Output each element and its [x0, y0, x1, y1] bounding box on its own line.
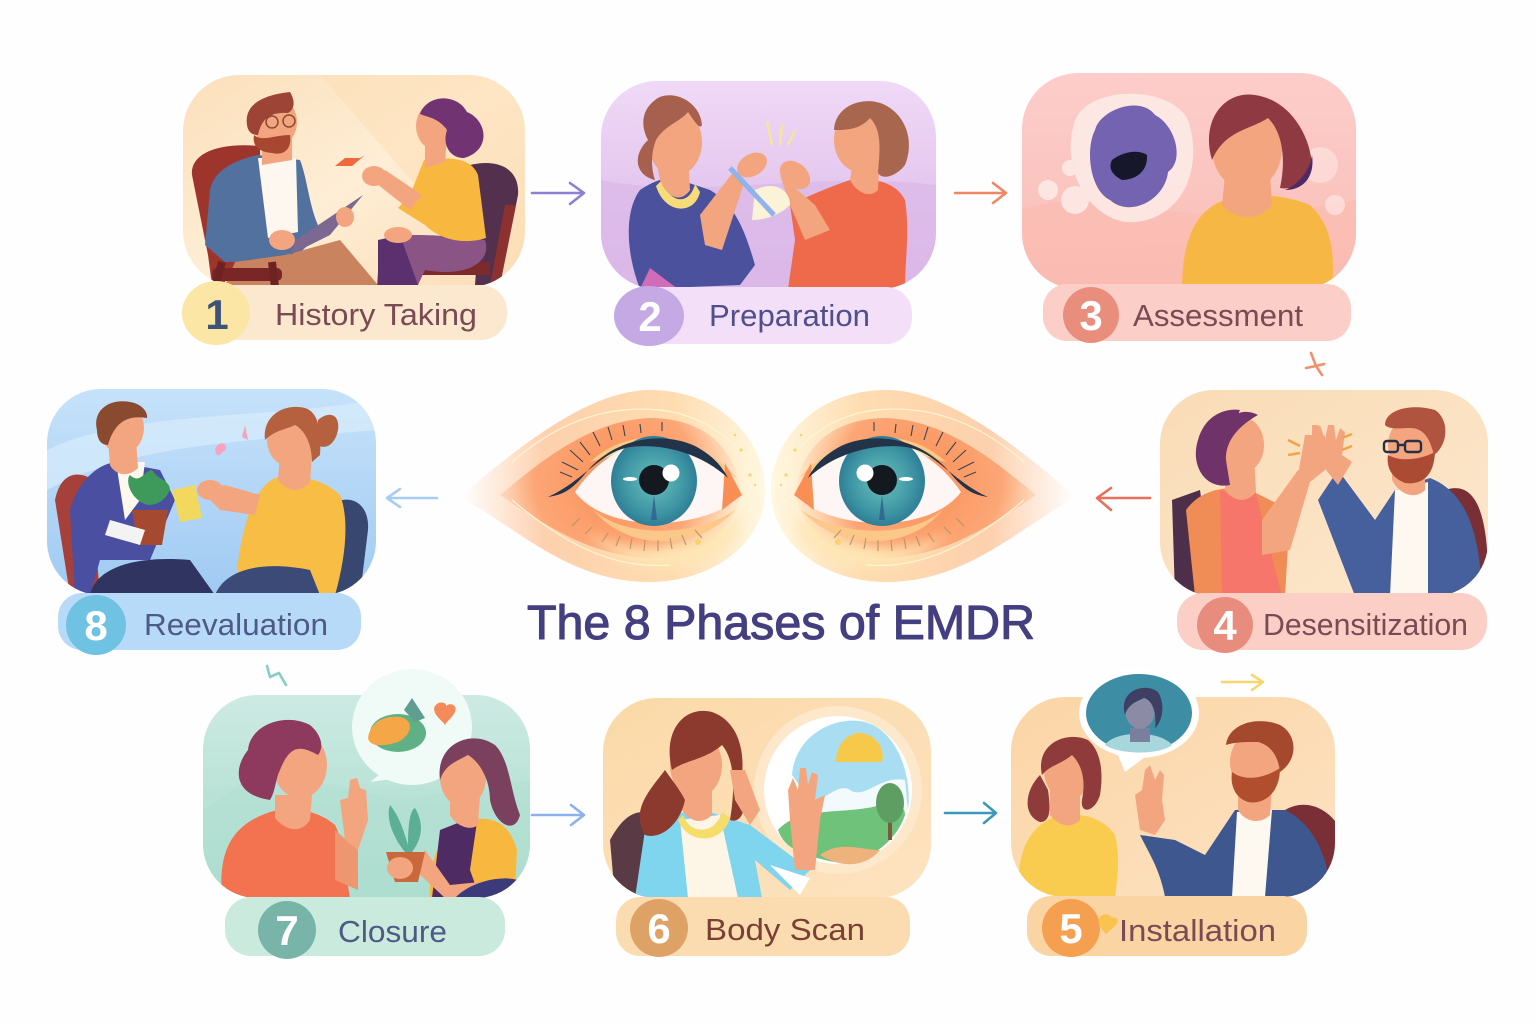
label pill [1177, 593, 1487, 650]
label pill [616, 897, 910, 956]
arrow: 2 to 3 [955, 183, 1006, 203]
number badge [630, 899, 688, 957]
label text: Reevaluation [144, 607, 328, 642]
illustration: man with plant and woman talking [47, 389, 376, 595]
arrow: 1 to 2 [532, 183, 584, 204]
panel: phase 3 assessment [1022, 73, 1356, 343]
illustration: woman with dark thought cloud [1022, 73, 1356, 289]
label pill [625, 287, 912, 344]
illustration: left woman and background [203, 695, 530, 898]
thought bubble [352, 669, 472, 785]
label pill [200, 285, 507, 340]
label pill [1043, 284, 1351, 341]
number: 5 [1059, 905, 1083, 952]
panel: phase 1 history taking [182, 75, 525, 345]
panel: phase 2 preparation [601, 81, 936, 346]
number: 3 [1079, 292, 1103, 339]
panel: phase 8 reevaluation [47, 389, 376, 655]
illustration: right woman with plant [386, 738, 520, 898]
arrow: 6 to 5 [945, 803, 996, 823]
label pill [58, 593, 361, 650]
label text: Installation [1119, 913, 1276, 948]
number badge [258, 901, 316, 959]
label pill [1027, 896, 1307, 956]
icon: small heart [1099, 914, 1118, 934]
label text: Closure [338, 914, 447, 949]
number badge [182, 281, 250, 345]
arrow: 4 to eyes [1097, 488, 1150, 510]
panel: phase 4 desensitization [1160, 390, 1488, 653]
icon: left eye [460, 390, 765, 582]
number: 7 [275, 907, 299, 954]
illustration: woman and man raised hands [1160, 390, 1488, 596]
number: 8 [84, 602, 108, 649]
arrow: 8 to 7 [267, 666, 286, 685]
number badge [1063, 287, 1119, 343]
illustration: therapist and client seated [183, 75, 525, 287]
label text: History Taking [275, 297, 477, 332]
central eyes [460, 390, 1076, 582]
panel: phase 6 body scan [603, 698, 931, 957]
number badge [66, 595, 126, 655]
arrow: 3 to 4 [1306, 353, 1324, 375]
arrow: 5 to next [1222, 675, 1263, 690]
arrow: eyes to 8 [387, 489, 437, 507]
panel: phase 5 installation [1011, 668, 1340, 957]
number: 6 [647, 905, 671, 952]
number badge [1042, 899, 1100, 957]
panel: phase 7 closure [203, 669, 530, 959]
illustration: woman touching head with landscape window [603, 698, 931, 898]
label pill [225, 897, 505, 956]
number: 4 [1213, 602, 1237, 649]
label text: Desensitization [1263, 607, 1468, 642]
number badge [614, 286, 684, 346]
label text: Preparation [709, 298, 870, 333]
arrow: 7 to 6 [532, 805, 584, 825]
illustration: woman and man with positive thought [1011, 697, 1340, 897]
label text: Body Scan [705, 912, 865, 947]
thought bubble portrait [1079, 668, 1199, 772]
illustration: two women tapping hands [601, 81, 936, 289]
label text: Assessment [1133, 298, 1303, 333]
number: 1 [205, 291, 229, 338]
title: The 8 Phases of EMDR [527, 597, 1035, 650]
number: 2 [638, 293, 662, 340]
number badge [1197, 597, 1253, 653]
icon: right eye [771, 390, 1076, 582]
